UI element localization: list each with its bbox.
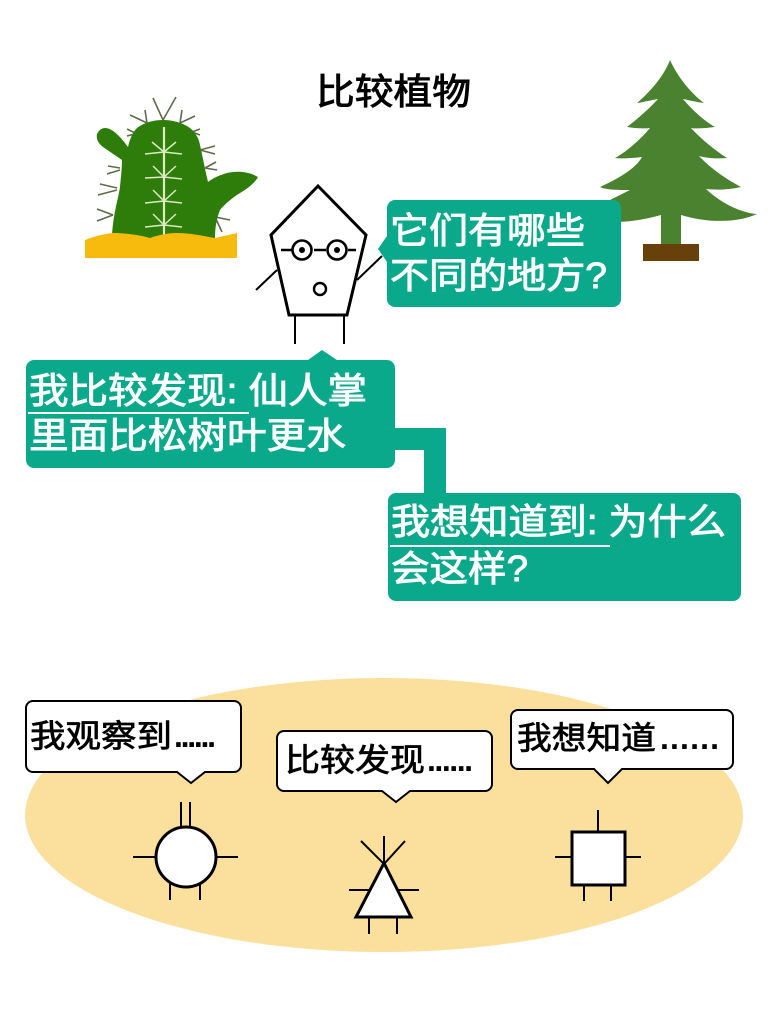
speech bubble: wonder: 我想知道 [517,720,656,756]
character: triangle [349,836,419,934]
speech bubble: compare: 比较发现 [285,742,425,778]
speech bubble: question [378,200,621,307]
icon: pine tree [600,60,757,261]
yellow ellipse background [25,678,743,952]
character: circle [133,802,238,900]
speech bubble: observed: 我观察到 [30,718,172,754]
speech bubble: wonder [511,710,733,783]
speech bubble: question: 它们有哪些 [390,210,585,251]
speech bubble: compare [277,731,492,802]
speech bubble: wonder: ...... [660,720,719,756]
character: square [555,810,641,901]
speech bubble: wondering [388,493,741,601]
connector between bubbles [394,428,446,494]
character: pentagon with glasses [256,186,382,344]
speech bubble: wondering: 会这样? [391,548,528,589]
speech bubble: observed: ...... [174,718,216,754]
speech bubble: comparison finding [26,350,395,468]
speech bubble: wondering: 我想知道到: 为什么 [391,501,726,542]
speech bubble: question: 不同的地方? [390,255,607,296]
speech bubble: observed [26,701,241,783]
speech bubble: comparison finding: 里面比松树叶更水 [29,415,346,456]
title: 比较植物 [316,71,471,112]
speech bubble: comparison finding: 我比较发现: 仙人掌 [29,370,367,411]
icon: cactus with sand [85,97,258,258]
speech bubble: compare: ...... [427,742,473,778]
